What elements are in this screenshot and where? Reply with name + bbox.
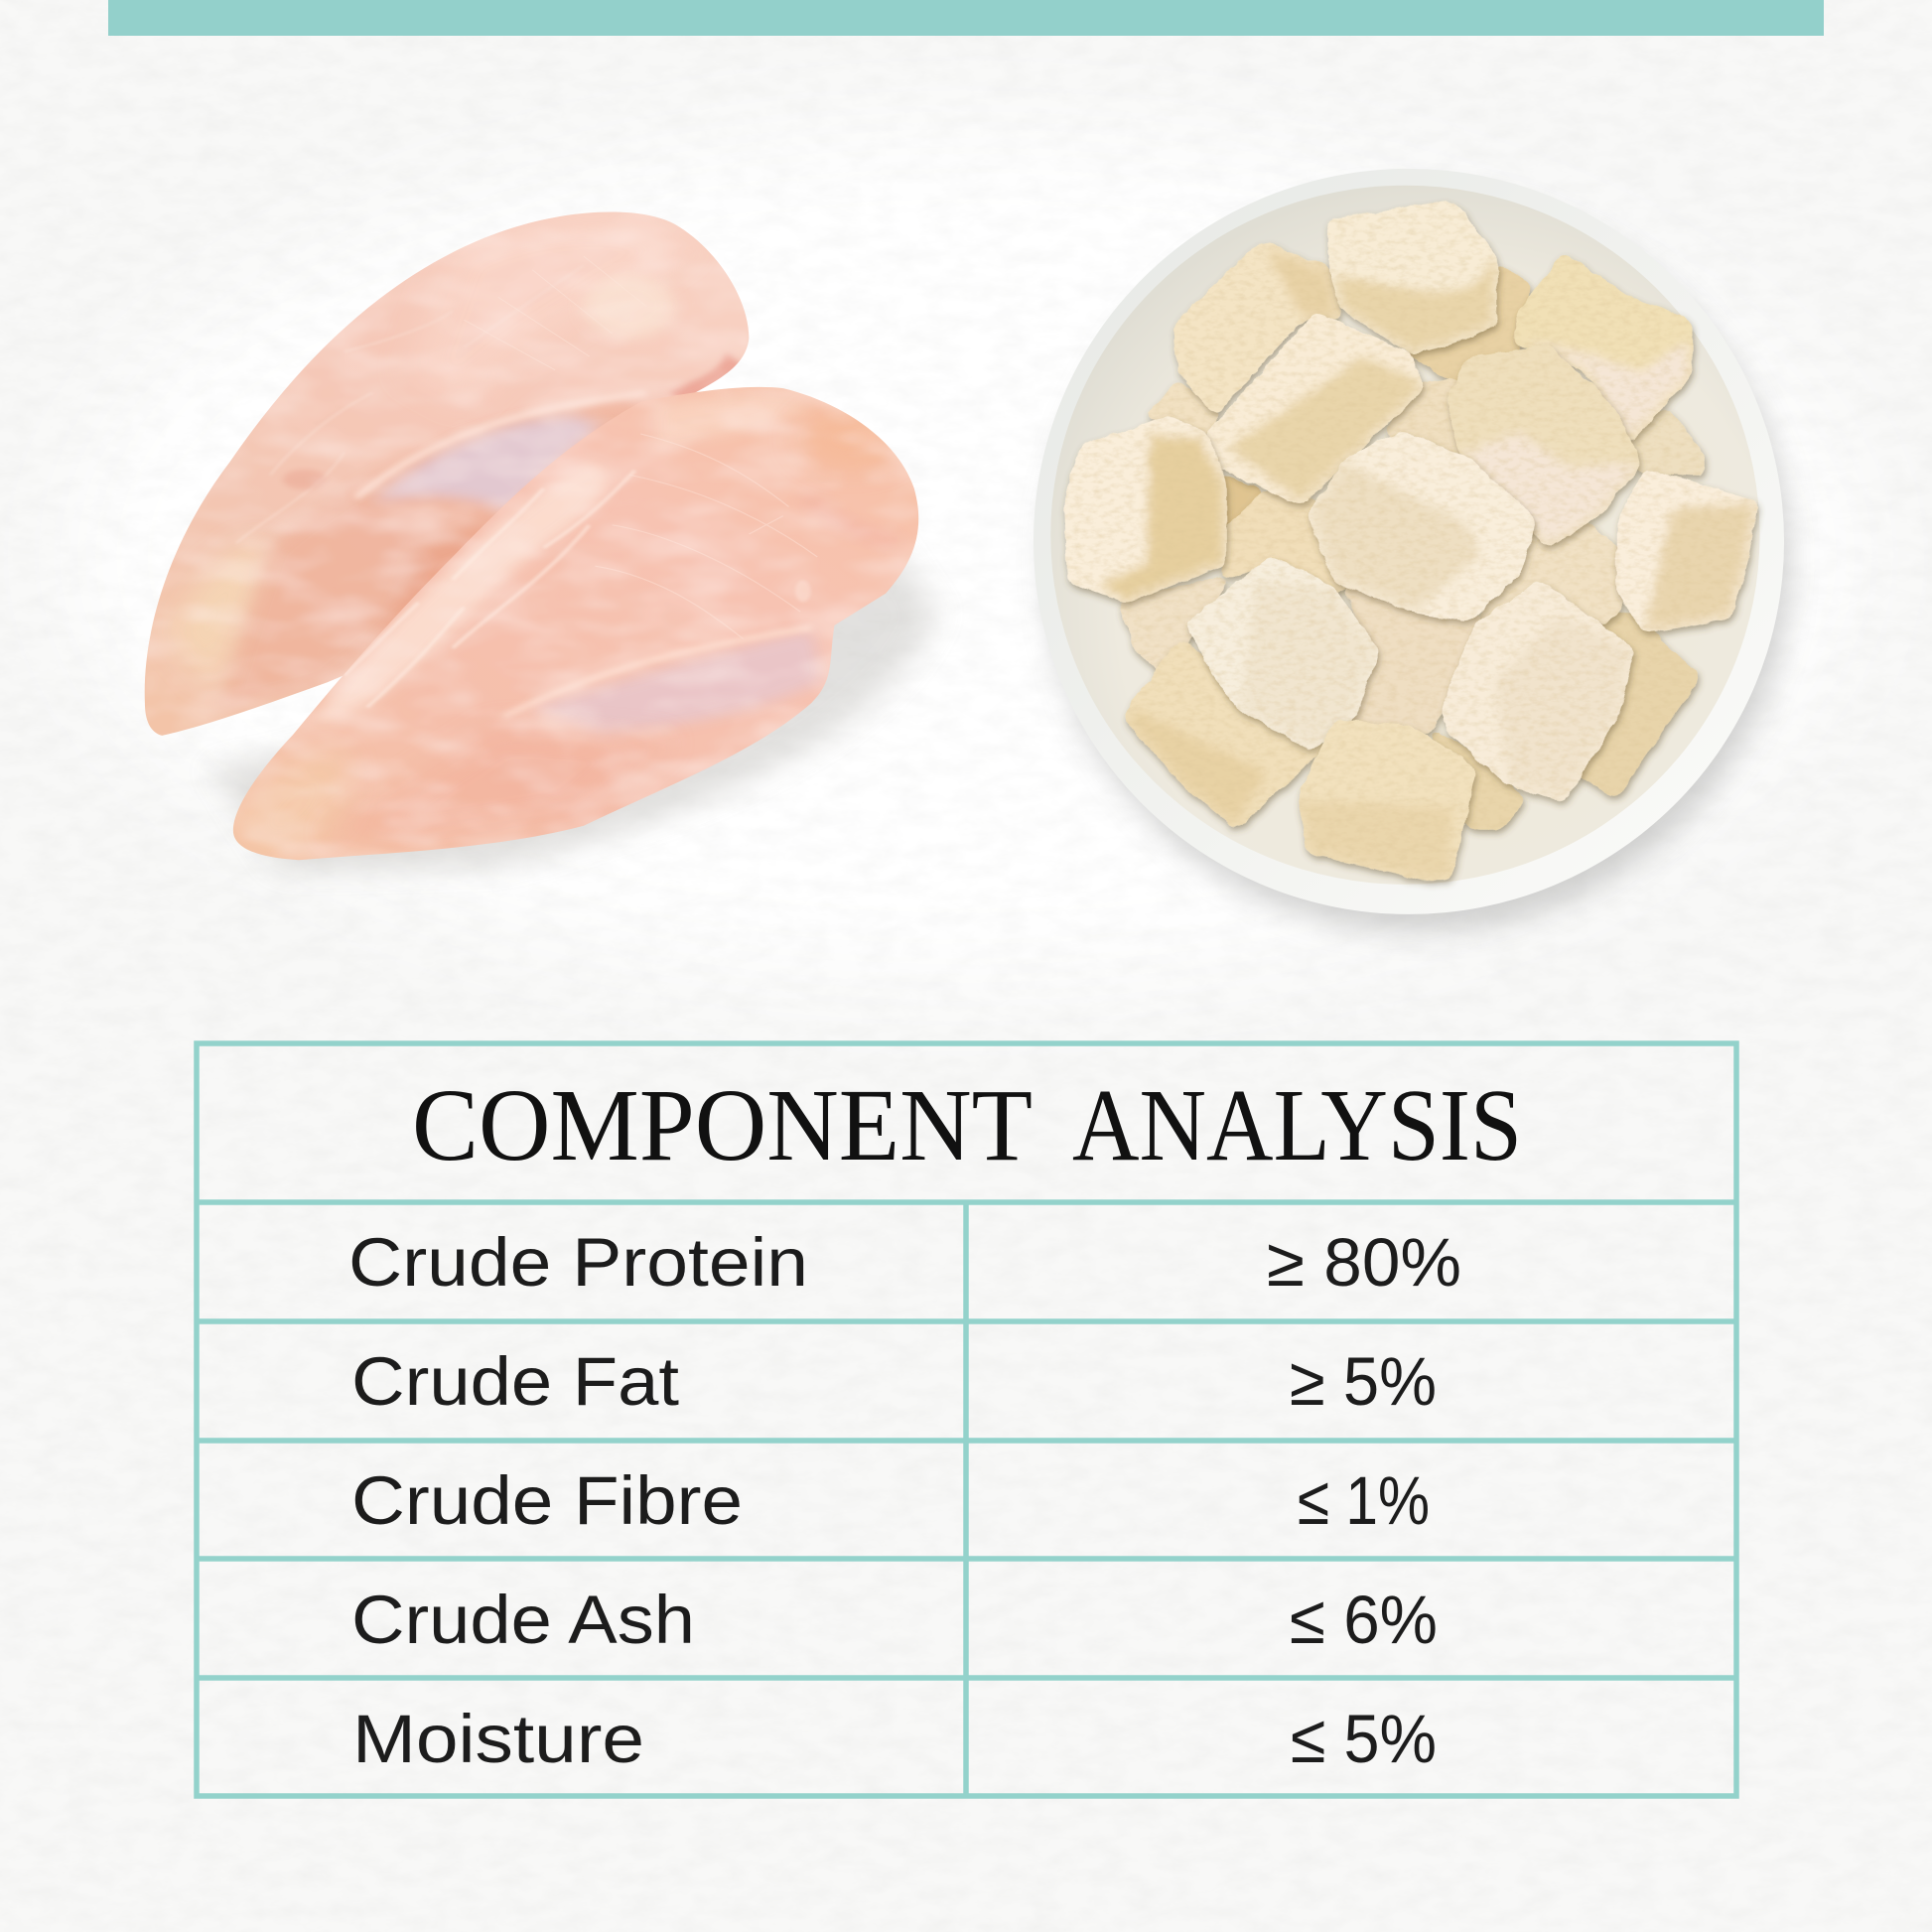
table heading: ANALYSIS	[1072, 1068, 1522, 1182]
top teal bar	[108, 0, 1824, 36]
row: crude ash	[351, 1582, 1438, 1658]
cube: lower left	[1127, 642, 1321, 825]
row: moisture: ≤ 5%	[1291, 1701, 1437, 1777]
cube: top left	[1177, 245, 1337, 410]
row: crude fat	[351, 1343, 1437, 1420]
row: crude fibre	[351, 1462, 1430, 1539]
cube: top centre	[1331, 205, 1494, 351]
cube: lower centre	[1190, 559, 1375, 747]
row: crude fibre: Crude Fibre	[351, 1462, 743, 1539]
row: crude fat: Crude Fat	[351, 1343, 679, 1420]
row: crude protein	[348, 1224, 1461, 1301]
table grid lines	[197, 1043, 1736, 1796]
cube: centre left	[1207, 316, 1421, 501]
panel: component analysis table	[197, 1043, 1736, 1796]
image: bowl of freeze-dried chicken cubes	[1034, 169, 1790, 931]
cube: top right	[1519, 258, 1689, 438]
row: crude ash: ≤ 6%	[1290, 1582, 1438, 1658]
cube: middle right	[1450, 349, 1638, 544]
cube: bottom	[1302, 724, 1473, 876]
row: moisture	[352, 1701, 1437, 1777]
row: moisture: Moisture	[352, 1701, 644, 1777]
image: raw chicken breasts	[145, 211, 937, 872]
row: crude fibre: ≤ 1%	[1298, 1462, 1430, 1539]
table heading	[412, 1068, 1522, 1182]
row: crude protein: Crude Protein	[348, 1224, 808, 1301]
cube: far right	[1620, 474, 1754, 630]
row: crude ash: Crude Ash	[351, 1582, 695, 1658]
cube: centre	[1311, 435, 1532, 618]
row: crude protein: ≥ 80%	[1267, 1224, 1461, 1301]
row: crude fat: ≥ 5%	[1290, 1343, 1437, 1420]
cube: far left	[1068, 420, 1223, 600]
table heading: COMPONENT	[412, 1068, 1033, 1182]
cube: lower right	[1444, 585, 1630, 797]
